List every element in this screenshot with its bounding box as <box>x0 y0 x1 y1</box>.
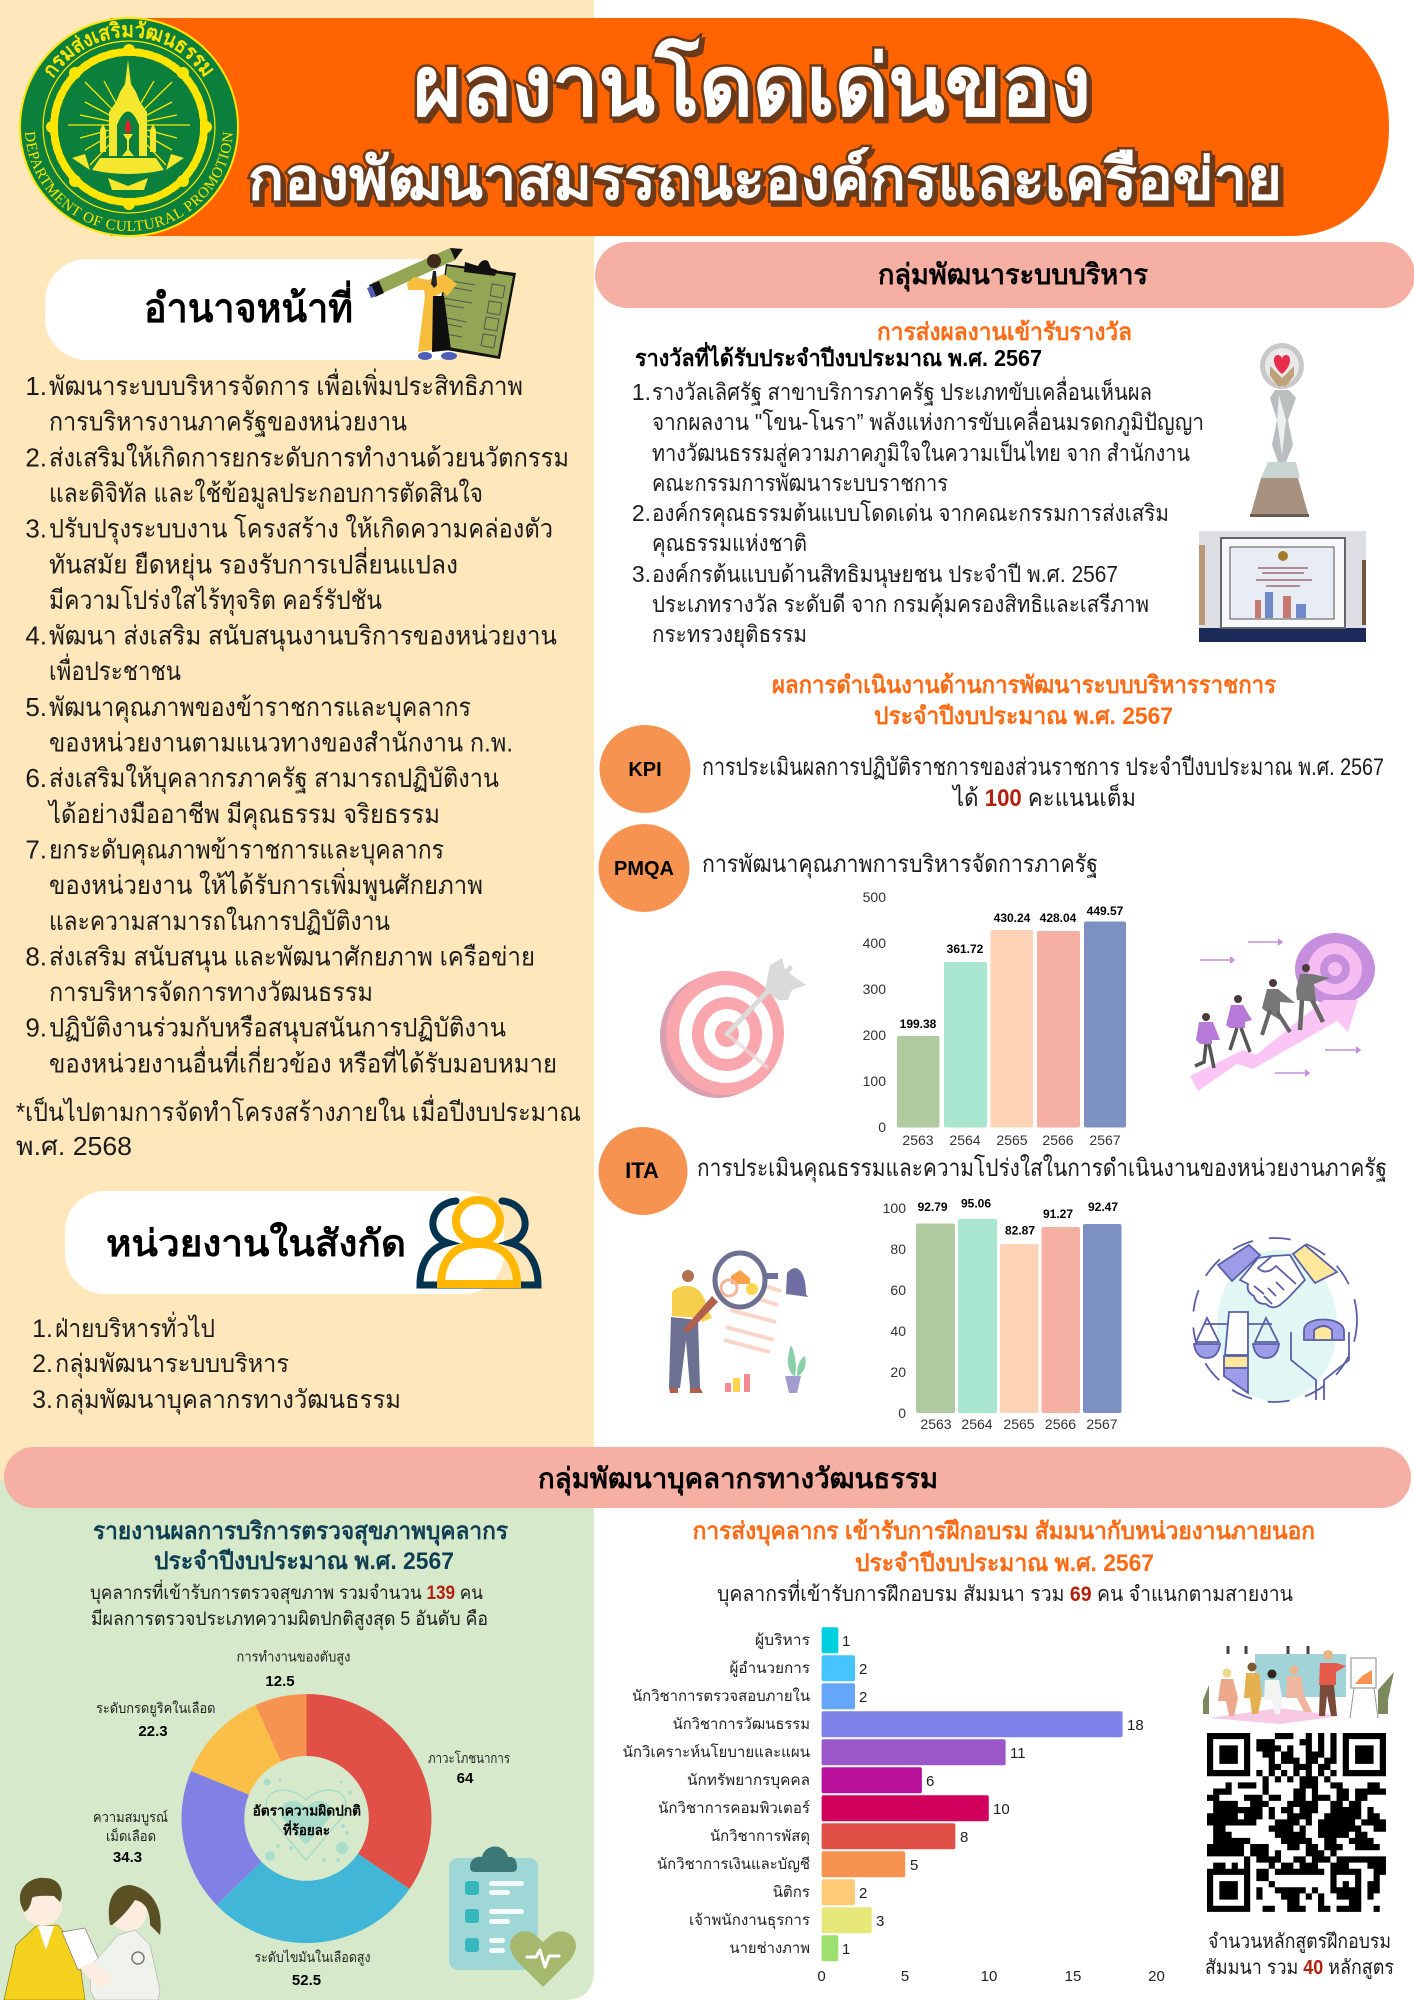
icon: clipboard with heart <box>449 1846 576 1987</box>
text block: duties list: 2. <box>25 442 47 472</box>
bar chart: PMQA scores: 199.38 <box>900 1017 937 1031</box>
text block: duties list: 5. <box>25 692 47 722</box>
bar chart: training by position: 11 <box>1010 1745 1026 1762</box>
icon: department logo seal <box>19 17 239 237</box>
icon: person with magnifier <box>669 1253 808 1393</box>
text block: award list: 3. <box>632 561 651 587</box>
title: ผลงานโดดเด่นของ <box>413 38 1091 133</box>
text block: duties list: ได้อย่างมืออาชีพ มีคุณธรรม จริยธรรม <box>47 799 440 830</box>
heading: performance results <box>772 672 1276 730</box>
badge: ITA <box>598 1127 688 1215</box>
text block: duties list: ยกระดับคุณภาพข้าราชการและบุคลากร <box>49 834 444 866</box>
label: uric acid: 22.3 <box>138 1723 168 1740</box>
text block: award list: รางวัลเลิศรัฐ สาขาบริการภาครัฐ ประเภทขับเคลื่อนเห็นผล <box>652 376 1152 406</box>
text block: structure note: *เป็นไปตามการจัดทำโครงสร้างภายใน เมื่อปีงบประมาณ <box>16 1094 581 1127</box>
bar chart: PMQA scores: 449.57 <box>1087 904 1124 918</box>
text block: duties list: ส่งเสริมให้บุคลากรภาครัฐ สามารถปฏิบัติงาน <box>49 763 499 794</box>
text block: health check summary <box>90 1579 488 1631</box>
text block: health check summary: บุคลากรที่เข้ารับการตรวจสุขภาพ รวมจำนวน 139 คน <box>90 1579 483 1605</box>
text block: duties list: ปฏิบัติงานร่วมกับหรือสนุบสนันการปฏิบัติงาน <box>49 1013 506 1044</box>
text block: structure note: พ.ศ. 2568 <box>16 1131 132 1161</box>
text block: award list: องค์กรคุณธรรมต้นแบบโดดเด่น จากคณะกรรมการส่งเสริม <box>652 500 1169 527</box>
text block: duties list: และความสามารถในการปฏิบัติงาน <box>49 906 390 936</box>
heading: health check report <box>93 1518 508 1575</box>
icon: patient and doctor <box>4 1878 161 2000</box>
bar chart: PMQA scores: 200 <box>863 1027 886 1043</box>
text block: duties list: ส่งเสริมให้เกิดการยกระดับการทำงานด้วยนวัตกรรม <box>49 442 569 472</box>
bar chart: training by position: นักวิชาการวัฒนธรรม <box>673 1716 810 1733</box>
section heading: cultural personnel development group: กลุ่มพัฒนาบุคลากรทางวัฒนธรรม <box>538 1463 938 1496</box>
label: blood count: 34.3 <box>113 1849 142 1866</box>
bar chart: PMQA scores: 2565 <box>996 1132 1028 1148</box>
text block: units list <box>32 1311 401 1415</box>
bar chart: PMQA scores: 361.72 <box>947 942 984 956</box>
panel: green health panel background <box>0 1480 594 2000</box>
badge: PMQA <box>598 824 690 912</box>
text block: units list: กลุ่มพัฒนาระบบบริหาร <box>55 1350 289 1379</box>
text block: duties list <box>25 368 569 1078</box>
text block: duties list: มีความโปร่งใสไร้ทุจริต คอร์รัปชัน <box>49 585 382 616</box>
text block: duties list: พัฒนาคุณภาพของข้าราชการและบุคลากร <box>49 692 471 723</box>
bar chart: PMQA scores: 2563 <box>902 1132 934 1148</box>
title: กองพัฒนาสมรรถนะองค์กรและเครือข่าย <box>248 146 1282 212</box>
bar chart: training by position: นักวิเคราะห์นโยบายและแผน <box>623 1743 810 1761</box>
bar chart: ITA scores: 2565 <box>1003 1416 1035 1432</box>
icon: crystal trophy <box>1250 343 1309 517</box>
text block: award list: องค์กรต้นแบบด้านสิทธิมนุษยชน ประจำปี พ.ศ. 2567 <box>652 561 1118 588</box>
donut chart: abnormal results: ที่ร้อยละ <box>283 1820 330 1838</box>
bar chart: ITA scores: 82.87 <box>1005 1224 1035 1238</box>
QR code <box>1207 1733 1386 1912</box>
icon: team climbing to target <box>1190 933 1375 1091</box>
heading: affiliated units: หน่วยงานในสังกัด <box>106 1221 406 1264</box>
text block: award list: ทางวัฒนธรรมสู่ความภาคภูมิใจในความเป็นไทย จาก สำนักงาน <box>652 438 1190 467</box>
bar chart: training by position: นักวิชาการคอมพิวเตอร์ <box>658 1800 810 1817</box>
badge: KPI <box>600 725 690 813</box>
bar chart: ITA scores: 80 <box>890 1241 906 1257</box>
text block: number of courses <box>1205 1931 1394 1980</box>
heading: health check report: ประจำปีงบประมาณ พ.ศ. 2567 <box>154 1548 454 1575</box>
label: nutrition: ภาวะโภชนาการ <box>428 1750 510 1766</box>
panel heading: administration development group: กลุ่มพัฒนาระบบบริหาร <box>878 259 1148 292</box>
icon: department logo seal: กรมส่งเสริมวัฒนธรรม <box>45 20 214 78</box>
text block: duties list: 4. <box>25 621 47 651</box>
bar chart: training by position: ผู้บริหาร <box>755 1632 810 1649</box>
icon: handshake with justice and people <box>1193 1238 1357 1402</box>
text block: duties list: 9. <box>25 1013 47 1043</box>
image: award certificate <box>1199 531 1366 642</box>
bar chart: training by position: เจ้าพนักงานธุรการ <box>689 1912 810 1930</box>
label: blood count: ความสมบูรณ์ <box>93 1809 168 1826</box>
subheading: awards received: รางวัลที่ได้รับประจำปีงบประมาณ พ.ศ. 2567 <box>635 341 1042 371</box>
bar chart: training by position: นายช่างภาพ <box>730 1940 810 1957</box>
bar chart: training by position: นักวิชาการพัสดุ <box>710 1828 810 1846</box>
bar chart: ITA scores: 2566 <box>1045 1416 1076 1432</box>
label: uric acid <box>96 1700 216 1740</box>
heading: training report <box>693 1518 1315 1577</box>
bar chart: training by position: 8 <box>960 1829 968 1846</box>
bar chart: PMQA scores: 2564 <box>949 1132 981 1148</box>
badge: ITA: ITA <box>625 1158 659 1183</box>
badge: KPI: KPI <box>628 759 662 781</box>
bar chart: training by position: 18 <box>1127 1717 1144 1734</box>
panel: duties heading card <box>45 259 475 360</box>
icon: person with pencil and clipboard <box>367 248 516 360</box>
text block: duties list: ปรับปรุงระบบงาน โครงสร้าง ให้เกิดความคล่องตัว <box>49 514 553 545</box>
text block: award list: กระทรวงยุติธรรม <box>652 621 807 648</box>
bar chart: ITA scores: 92.47 <box>1088 1200 1118 1214</box>
text block: duties list: การบริหารงานภาครัฐของหน่วยงาน <box>49 407 407 438</box>
text block: duties list: พัฒนาระบบบริหารจัดการ เพื่อเพิ่มประสิทธิภาพ <box>49 368 523 401</box>
text block: duties list: ส่งเสริม สนับสนุน และพัฒนาศักยภาพ เครือข่าย <box>49 941 535 972</box>
text block: KPI result: ได้ 100 คะแนนเต็ม <box>951 783 1136 812</box>
heading: health check report: รายงานผลการบริการตรวจสุขภาพบุคลากร <box>93 1518 508 1547</box>
text block: duties list: 6. <box>25 763 47 793</box>
bar chart: PMQA scores: 400 <box>863 935 886 951</box>
bar chart: PMQA scores: 430.24 <box>994 911 1031 925</box>
text block: units list: 1. <box>32 1315 53 1343</box>
label: blood count: เม็ดเลือด <box>106 1827 156 1844</box>
text block: duties list: ทันสมัย ยืดหยุ่น รองรับการเปลี่ยนแปลง <box>49 546 458 580</box>
bar chart: PMQA scores <box>863 889 1126 1148</box>
bar chart: training by position: ผู้อำนวยการ <box>730 1660 810 1677</box>
text block: award list: คณะกรรมการพัฒนาระบบราชการ <box>652 470 948 496</box>
label: uric acid: ระดับกรดยูริคในเลือด <box>96 1700 216 1717</box>
bar chart: training by position <box>623 1627 1165 1985</box>
bar chart: training by position: นิติกร <box>773 1884 810 1901</box>
text block: units list: 3. <box>32 1386 53 1414</box>
bar chart: ITA scores: 60 <box>890 1282 906 1298</box>
bar chart: PMQA scores: 2566 <box>1042 1132 1074 1148</box>
label: nutrition: 64 <box>457 1770 474 1787</box>
text block: duties list: 3. <box>25 514 47 544</box>
header banner <box>110 18 1389 236</box>
bar chart: ITA scores: 91.27 <box>1043 1207 1073 1221</box>
heading: training report: การส่งบุคลากร เข้ารับการฝึกอบรม สัมมนากับหน่วยงานภายนอก <box>693 1518 1315 1547</box>
bar chart: ITA scores: 20 <box>890 1364 906 1380</box>
text block: number of courses: จำนวนหลักสูตรฝึกอบรม <box>1208 1931 1391 1954</box>
text: PMQA title: การพัฒนาคุณภาพการบริหารจัดการภาครัฐ <box>702 851 1098 879</box>
heading: duties: อำนาจหน้าที่ <box>144 280 353 331</box>
text: training summary: บุคลากรที่เข้ารับการฝึกอบรม สัมมนา รวม 69 คน จำแนกตามสายงาน <box>717 1579 1293 1607</box>
bar chart: training by position: นักวิชาการตรวจสอบภายใน <box>632 1687 810 1705</box>
bar chart: ITA scores: 2567 <box>1086 1416 1118 1432</box>
bar chart: ITA scores: 92.79 <box>918 1200 948 1214</box>
text block: award list: 1. <box>632 379 651 405</box>
text block: units list: 2. <box>32 1350 53 1378</box>
text block: units list: กลุ่มพัฒนาบุคลากรทางวัฒนธรรม <box>55 1386 401 1415</box>
bar chart: PMQA scores: 0 <box>878 1119 886 1135</box>
bar chart: PMQA scores: 2567 <box>1089 1132 1121 1148</box>
label: liver <box>236 1649 350 1690</box>
bar chart: PMQA scores: 300 <box>863 981 886 997</box>
text block: duties list: 1. <box>25 371 47 401</box>
label: blood count <box>93 1809 168 1866</box>
bar chart: training by position: 20 <box>1148 1968 1165 1985</box>
icon: training seminar illustration <box>1203 1646 1394 1724</box>
bar chart: training by position: 1 <box>842 1633 850 1650</box>
text block: duties list: การบริหารจัดการทางวัฒนธรรม <box>49 977 373 1007</box>
text block: duties list: 7. <box>25 834 47 864</box>
bar chart: ITA scores: 100 <box>883 1200 906 1216</box>
text block: health check summary: มีผลการตรวจประเภทความผิดปกติสูงสุด 5 อันดับ คือ <box>91 1608 488 1631</box>
text block: units list: ฝ่ายบริหารทั่วไป <box>55 1311 215 1343</box>
bar chart: training by position: 6 <box>926 1773 934 1790</box>
text block: award list: ประเภทรางวัล ระดับดี จาก กรมคุ้มครองสิทธิและเสรีภาพ <box>652 591 1149 618</box>
icon: heart in donut centre <box>264 1778 352 1862</box>
bar chart: training by position: นักวิชาการเงินและบัญชี <box>657 1856 810 1873</box>
bar chart: training by position: 15 <box>1065 1968 1081 1985</box>
label: liver: 12.5 <box>265 1673 295 1690</box>
panel heading: administration development group <box>595 242 1414 308</box>
bar chart: PMQA scores: 100 <box>863 1073 886 1089</box>
bar chart: ITA scores: 0 <box>898 1405 906 1421</box>
label: blood fat: 52.5 <box>292 1972 321 1989</box>
badge: PMQA: PMQA <box>614 858 674 880</box>
text block: duties list: ของหน่วยงานอื่นที่เกี่ยวข้อง หรือที่ได้รับมอบหมาย <box>49 1045 557 1078</box>
bar chart: ITA scores: 95.06 <box>961 1196 991 1210</box>
bar chart: training by position: 1 <box>842 1941 850 1958</box>
text block: duties list: ของหน่วยงานตามแนวทางของสำนักงาน ก.พ. <box>49 728 513 758</box>
bar chart: training by position: 2 <box>859 1661 867 1678</box>
bar chart: training by position: 10 <box>993 1801 1010 1818</box>
text block: duties list: เพื่อประชาชน <box>49 653 181 686</box>
text block: duties list: 8. <box>25 941 47 971</box>
text block: number of courses: สัมมนา รวม 40 หลักสูตร <box>1205 1957 1394 1980</box>
heading: performance results: ประจำปีงบประมาณ พ.ศ. 2567 <box>874 703 1173 730</box>
heading: training report: ประจำปีงบประมาณ พ.ศ. 2567 <box>855 1550 1154 1577</box>
donut chart: abnormal results <box>93 1649 510 1989</box>
text block: duties list: พัฒนา ส่งเสริม สนับสนุนงานบริการของหน่วยงาน <box>49 621 557 652</box>
icon: department logo seal: DEPARTMENT OF CULTURAL PROMOTION <box>25 131 233 231</box>
text block: duties list: ของหน่วยงาน ให้ได้รับการเพิ่มพูนศักยภาพ <box>49 867 483 901</box>
text block: award list: จากผลงาน "โขน-โนรา” พลังแห่งการขับเคลื่อนมรดกภูมิปัญญา <box>652 406 1204 436</box>
heading: performance results: ผลการดำเนินงานด้านการพัฒนาระบบบริหารราชการ <box>772 672 1276 699</box>
icon: target with arrow <box>660 958 806 1098</box>
donut chart: abnormal results: อัตราความผิดปกติ <box>253 1803 361 1819</box>
bar chart: training by position: 5 <box>910 1857 918 1874</box>
bar chart: ITA scores <box>883 1196 1122 1432</box>
panel: affiliated units heading card <box>65 1191 504 1294</box>
bar chart: training by position: 0 <box>817 1968 826 1985</box>
text block: award list <box>632 376 1204 648</box>
icon: people group <box>420 1200 538 1285</box>
bar chart: ITA scores: 2564 <box>961 1416 993 1432</box>
label: blood fat: ระดับไขมันในเลือดสูง <box>254 1949 370 1966</box>
section heading: cultural personnel development group <box>4 1447 1411 1508</box>
bar chart: training by position: 10 <box>981 1968 997 1985</box>
bar chart: training by position: 2 <box>859 1885 867 1902</box>
title <box>248 38 1282 212</box>
label: nutrition <box>428 1750 510 1787</box>
text block: KPI result <box>702 754 1384 812</box>
bar chart: training by position: 5 <box>901 1968 909 1985</box>
text block: structure note <box>16 1094 581 1161</box>
heading: awards: การส่งผลงานเข้ารับรางวัล <box>877 319 1132 346</box>
label: blood fat <box>254 1949 370 1989</box>
bar chart: PMQA scores: 428.04 <box>1040 911 1077 925</box>
bar chart: training by position: 2 <box>859 1689 867 1706</box>
text block: duties list: และดิจิทัล และใช้ข้อมูลประกอบการตัดสินใจ <box>49 478 483 509</box>
text block: award list: 2. <box>632 500 651 526</box>
text block: award list: คุณธรรมแห่งชาติ <box>652 530 807 557</box>
bar chart: PMQA scores: 500 <box>863 889 886 905</box>
bar chart: ITA scores: 40 <box>890 1323 906 1339</box>
bar chart: training by position: 3 <box>876 1913 884 1930</box>
bar chart: training by position: นักทรัพยากรบุคคล <box>687 1772 810 1790</box>
label: liver: การทำงานของตับสูง <box>236 1649 350 1666</box>
bar chart: ITA scores: 2563 <box>920 1416 952 1432</box>
